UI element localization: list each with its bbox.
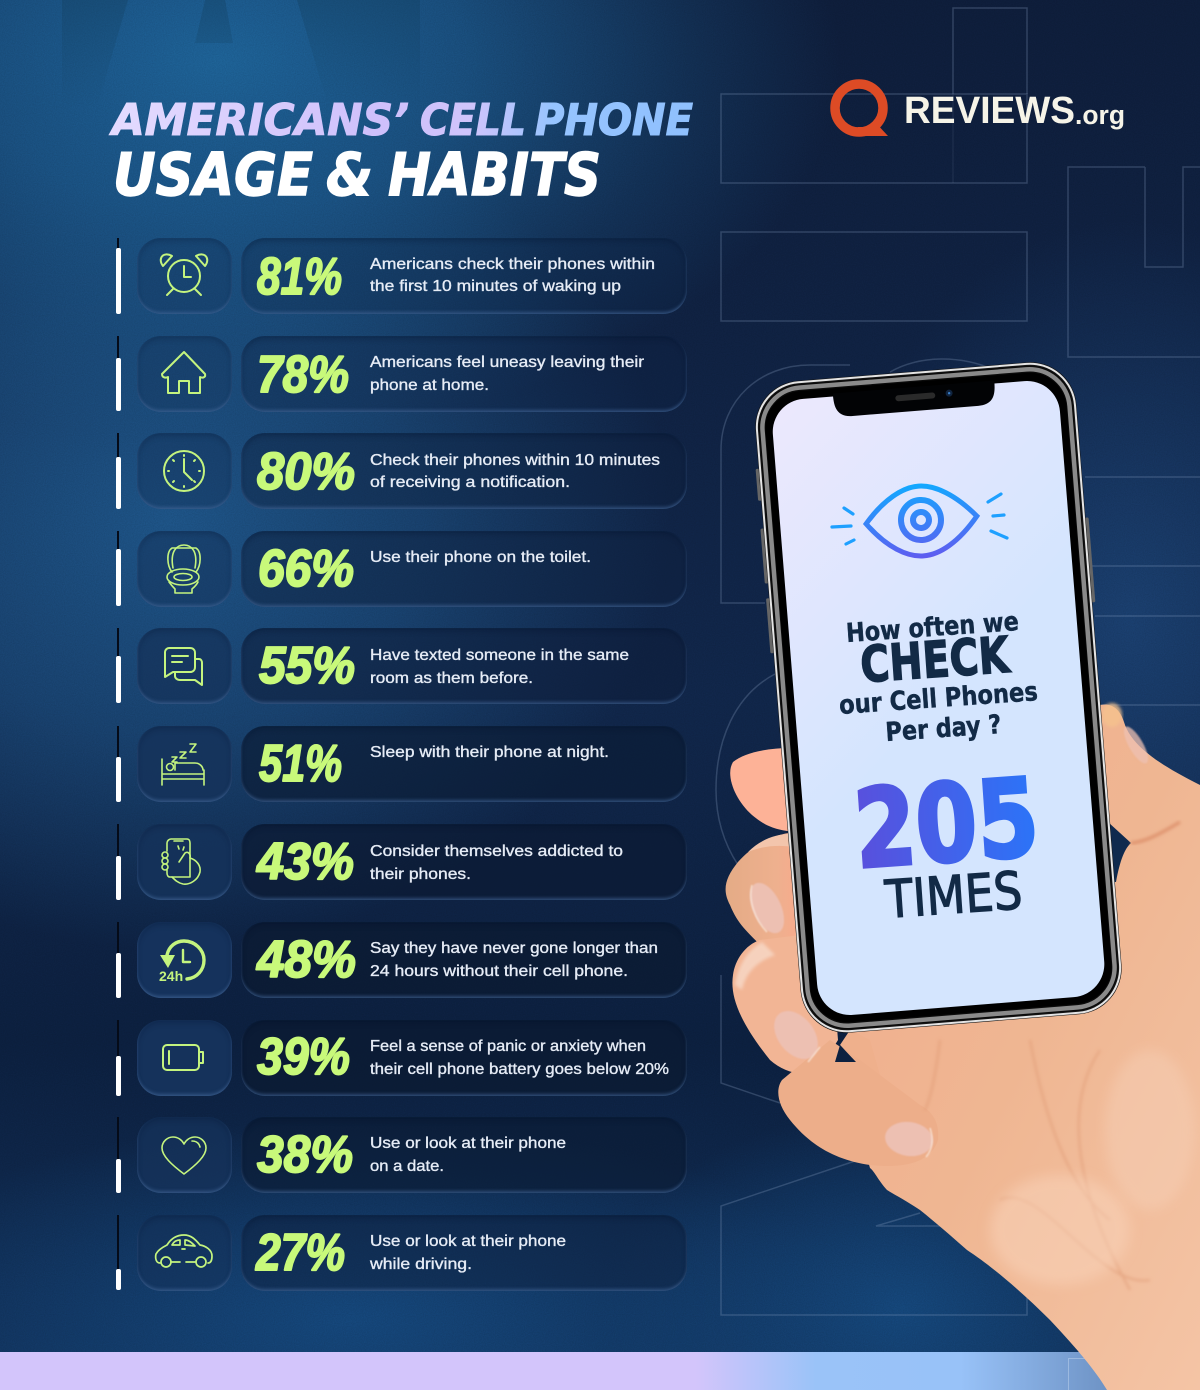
stat text: Consider themselves addicted to [370, 843, 623, 860]
phone question text: our Cell Phones [838, 677, 1039, 721]
stat text: Americans check their phones within [370, 256, 655, 273]
stat text [241, 628, 687, 704]
stat row: 43% [116, 824, 687, 900]
stat row: 48% [116, 922, 687, 998]
title [108, 95, 694, 209]
stat text: on a date. [370, 1158, 444, 1175]
logo: Reviews.org [830, 79, 1125, 137]
stat text: phone at home. [370, 377, 489, 394]
side buttons [756, 469, 762, 501]
title: AMERICANS’ [109, 95, 409, 146]
stat text [241, 1215, 687, 1291]
bottom gradient band [0, 1352, 1200, 1390]
stat row: 51% [116, 726, 687, 802]
stat text [241, 336, 687, 412]
stat text: while driving. [369, 1256, 472, 1273]
stat row: 81% [116, 238, 687, 314]
logo: Reviews.org: REVIEWS [904, 90, 1075, 132]
icon: clock [137, 433, 232, 509]
icon: toilet [137, 531, 232, 607]
icon: house [137, 336, 232, 412]
stat text: Sleep with their phone at night. [370, 744, 609, 761]
phone [749, 358, 1128, 1037]
label: times: TIMES [883, 861, 1024, 931]
phone question text: Per day ? [885, 710, 1002, 748]
stat text: Use or look at their phone [370, 1135, 566, 1152]
number: 205: 205 [850, 756, 1043, 893]
stat text: 43% [256, 833, 354, 891]
icon: low battery [137, 1020, 232, 1096]
stat row: 66% [116, 531, 687, 607]
title: PHONE [535, 95, 693, 146]
stat text: 66% [258, 540, 354, 598]
icon: eye [832, 482, 1007, 560]
stat row: 27% [116, 1215, 687, 1291]
icon: 24 hours history [137, 922, 232, 998]
stat text: Use or look at their phone [370, 1233, 566, 1250]
stat text: 27% [255, 1224, 345, 1282]
phone screen [770, 378, 1107, 1018]
stat text: room as them before. [370, 670, 533, 687]
phone question text: How often we [845, 607, 1020, 649]
stat row: 55% [116, 628, 687, 704]
stat text: Say they have never gone longer than [370, 940, 658, 957]
stat text: 81% [257, 248, 342, 306]
stat row: 78% [116, 336, 687, 412]
stat text: Use their phone on the toilet. [370, 549, 591, 566]
stat text: of receiving a notification. [370, 474, 570, 491]
stat text [241, 1020, 687, 1096]
stat text [241, 824, 687, 900]
title: HABITS [388, 140, 601, 209]
stat text: 78% [257, 346, 349, 404]
stat text: Americans feel uneasy leaving their [370, 354, 645, 371]
icon: bed with zzz [137, 726, 232, 802]
icon: heart [137, 1117, 232, 1193]
stat text: 55% [259, 637, 355, 695]
stat text: Have texted someone in the same [370, 647, 629, 664]
icon: chat bubbles [137, 628, 232, 704]
stat text [241, 922, 687, 998]
stat text [241, 726, 687, 802]
stat text: Check their phones within 10 minutes [370, 452, 660, 469]
stat row: 39% [116, 1020, 687, 1096]
notch [833, 381, 996, 417]
stat text: 38% [257, 1126, 353, 1184]
title: & [326, 140, 373, 209]
stat text [241, 1117, 687, 1193]
stat text: 51% [259, 735, 342, 793]
icon: alarm clock [137, 238, 232, 314]
stat text: 24 hours without their cell phone. [370, 963, 628, 980]
icon: hand holding phone [137, 824, 232, 900]
stat row: 38% [116, 1117, 687, 1193]
stat text: 48% [256, 931, 356, 989]
fingernails [743, 723, 1153, 1159]
stat text: Feel a sense of panic or anxiety when [370, 1038, 646, 1055]
icon: 24 hours history: 24h [159, 968, 183, 984]
stat text [241, 433, 687, 509]
logo: Reviews.org: .org [1075, 100, 1125, 130]
stat text: their cell phone battery goes below 20% [370, 1061, 669, 1078]
hand and phone illustration [726, 362, 1200, 1390]
stat text [241, 531, 687, 607]
hand [726, 703, 1200, 1390]
hand shading and creases [1131, 822, 1180, 843]
stat text: 80% [257, 443, 355, 501]
stat text: the first 10 minutes of waking up [370, 278, 621, 295]
stat text: their phones. [370, 866, 471, 883]
title: CELL [420, 95, 526, 146]
stat text [241, 238, 687, 314]
stat text: 39% [257, 1028, 350, 1086]
phone question text [838, 607, 1039, 748]
phone question text: CHECK [858, 626, 1013, 694]
stat row: 80% [116, 433, 687, 509]
icon: car [137, 1215, 232, 1291]
phone body [752, 359, 1125, 1036]
title: USAGE [113, 140, 313, 209]
